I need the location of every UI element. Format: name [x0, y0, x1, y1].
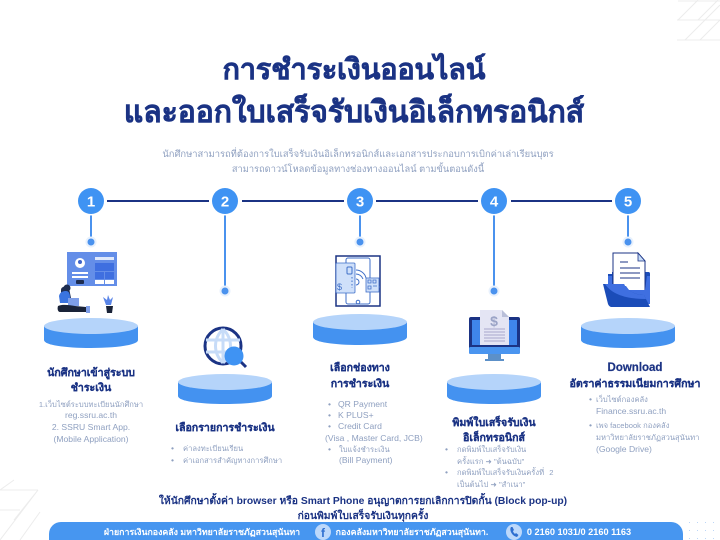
step 3 marker: [346, 186, 374, 248]
icon: payment methods: $: [337, 282, 342, 292]
icon: invoice on monitor: $: [490, 313, 498, 329]
step 2 marker: 2: [221, 194, 229, 210]
step 3 text: QR Payment: [338, 399, 388, 409]
step 3 text: [325, 361, 423, 465]
step 2 text: [171, 421, 282, 465]
footer bar: ฝ่ายการเงินกองคลัง มหาวิทยาลัยราชภัฏสวนสุนันทา: [104, 527, 300, 538]
icon: folder with document: [603, 253, 650, 307]
step 3 text: การชำระเงิน: [331, 378, 390, 390]
step 4 text: กดพิมพ์ใบเสร็จรับเงินครั้งที่ 2: [457, 467, 553, 477]
step 5 text: •: [589, 420, 592, 430]
step 4 marker: [480, 186, 508, 296]
icon: facebook: f: [321, 526, 326, 540]
step 5 text: เว็บไซต์กองคลัง: [596, 394, 648, 404]
footer bar: กองคลังมหาวิทยาลัยราชภัฏสวนสุนันทา.: [336, 527, 488, 538]
step 5 text: อัตราค่าธรรมเนียมการศึกษา: [570, 377, 701, 390]
step 5 text: [570, 362, 701, 454]
footer bar: 0 2160 1031/0 2160 1163: [527, 527, 631, 537]
subtitle: นักศึกษาสามารถที่ต้องการใบเสร็จรับเงินอิเล็กทรอนิกส์และเอกสารประกอบการเบิกค่าเล่าเรียนบุตร: [162, 147, 554, 160]
step 4 marker: 4: [490, 194, 499, 210]
step 3 text: ใบแจ้งชำระเงิน: [339, 445, 390, 454]
step 4 text: ครั้งแรก ➜ "ต้นฉบับ": [457, 456, 525, 466]
step 4 text: [445, 415, 553, 489]
step 5 text: Finance.ssru.ac.th: [596, 406, 666, 416]
notice: [159, 492, 567, 523]
platform 1: [44, 318, 138, 348]
step 2 text: ค่าเอกสารสำคัญทางการศึกษา: [183, 456, 282, 465]
timeline connector: [107, 200, 612, 202]
step 3 text: Credit Card: [338, 421, 382, 431]
step 5 text: •: [589, 394, 592, 404]
step 4 text: อิเล็กทรอนิกส์: [462, 430, 526, 444]
step 4 text: พิมพ์ใบเสร็จรับเงิน: [452, 415, 536, 429]
title: การชำระเงินออนไลน์: [223, 52, 486, 86]
subtitle: สามารถดาวน์โหลดข้อมูลทางช่องทางออนไลน์ ตามขั้นตอนดังนี้: [232, 162, 485, 175]
step 4 text: กดพิมพ์ใบเสร็จรับเงิน: [457, 444, 526, 454]
step 5 text: มหาวิทยาลัยราชภัฏสวนสุนันทา: [596, 433, 699, 442]
step 4 text: •: [445, 444, 448, 454]
title: [124, 52, 585, 129]
step 4 text: เป็นต้นไป ➜ "สำเนา": [457, 479, 526, 489]
step 3 text: •: [328, 421, 331, 431]
step 2 marker: [210, 186, 240, 296]
step 5 text: (Google Drive): [596, 444, 652, 454]
subtitle: [162, 147, 554, 175]
step 3 text: •: [328, 444, 331, 454]
step 1 text: 2. SSRU Smart App.: [52, 422, 130, 432]
step 2 text: •: [171, 443, 174, 453]
step 2 text: เลือกรายการชำระเงิน: [175, 421, 275, 434]
step 1 text: reg.ssru.ac.th: [65, 410, 117, 420]
step 3 text: (Visa , Master Card, JCB): [325, 433, 423, 443]
notice: ให้นักศึกษาตั้งค่า browser หรือ Smart Phone อนุญาตการยกเลิกการปิดกั้น (Block pop-up): [159, 492, 567, 508]
step 1 marker: 1: [87, 194, 95, 210]
step 3 text: K PLUS+: [338, 410, 374, 420]
platform 2: [178, 374, 272, 404]
notice: ก่อนพิมพ์ใบเสร็จรับเงินทุกครั้ง: [298, 507, 428, 523]
step 2 text: ค่าลงทะเบียนเรียน: [183, 444, 243, 453]
icon: phone: [506, 524, 522, 540]
icon: magnifier globe: [205, 328, 246, 367]
step 1 text: ชำระเงิน: [71, 382, 112, 394]
icon: facebook: [315, 524, 331, 540]
step 3 marker: 3: [356, 194, 364, 210]
platform 5: [581, 318, 675, 348]
step 2 text: •: [171, 455, 174, 465]
step 3 text: •: [328, 399, 331, 409]
step 3 text: •: [328, 410, 331, 420]
step 1 text: 1.เว็บไซต์ระบบทะเบียนนักศึกษา: [39, 399, 143, 409]
step 3 text: (Bill Payment): [339, 455, 393, 465]
icon: payment methods: [336, 256, 380, 306]
step 5 marker: [614, 186, 642, 248]
footer bar: [49, 522, 683, 540]
step 1 text: (Mobile Application): [54, 434, 129, 444]
step 3 text: เลือกช่องทาง: [330, 361, 390, 374]
step 1 text: [39, 366, 143, 444]
step 4 text: •: [445, 467, 448, 477]
platform 4: [447, 374, 541, 404]
step 1 marker: [76, 186, 106, 248]
step 5 text: Download: [608, 362, 662, 374]
step 1 text: นักศึกษาเข้าสู่ระบบ: [47, 366, 135, 380]
icon: invoice on monitor: [469, 310, 520, 361]
title: และออกใบเสร็จรับเงินอิเล็กทรอนิกส์: [124, 93, 585, 129]
icon: student with login screen: [58, 252, 117, 313]
platform 3: [313, 314, 407, 345]
step 5 marker: 5: [624, 194, 632, 210]
step 5 text: เพจ facebook กองคลัง: [596, 421, 670, 430]
